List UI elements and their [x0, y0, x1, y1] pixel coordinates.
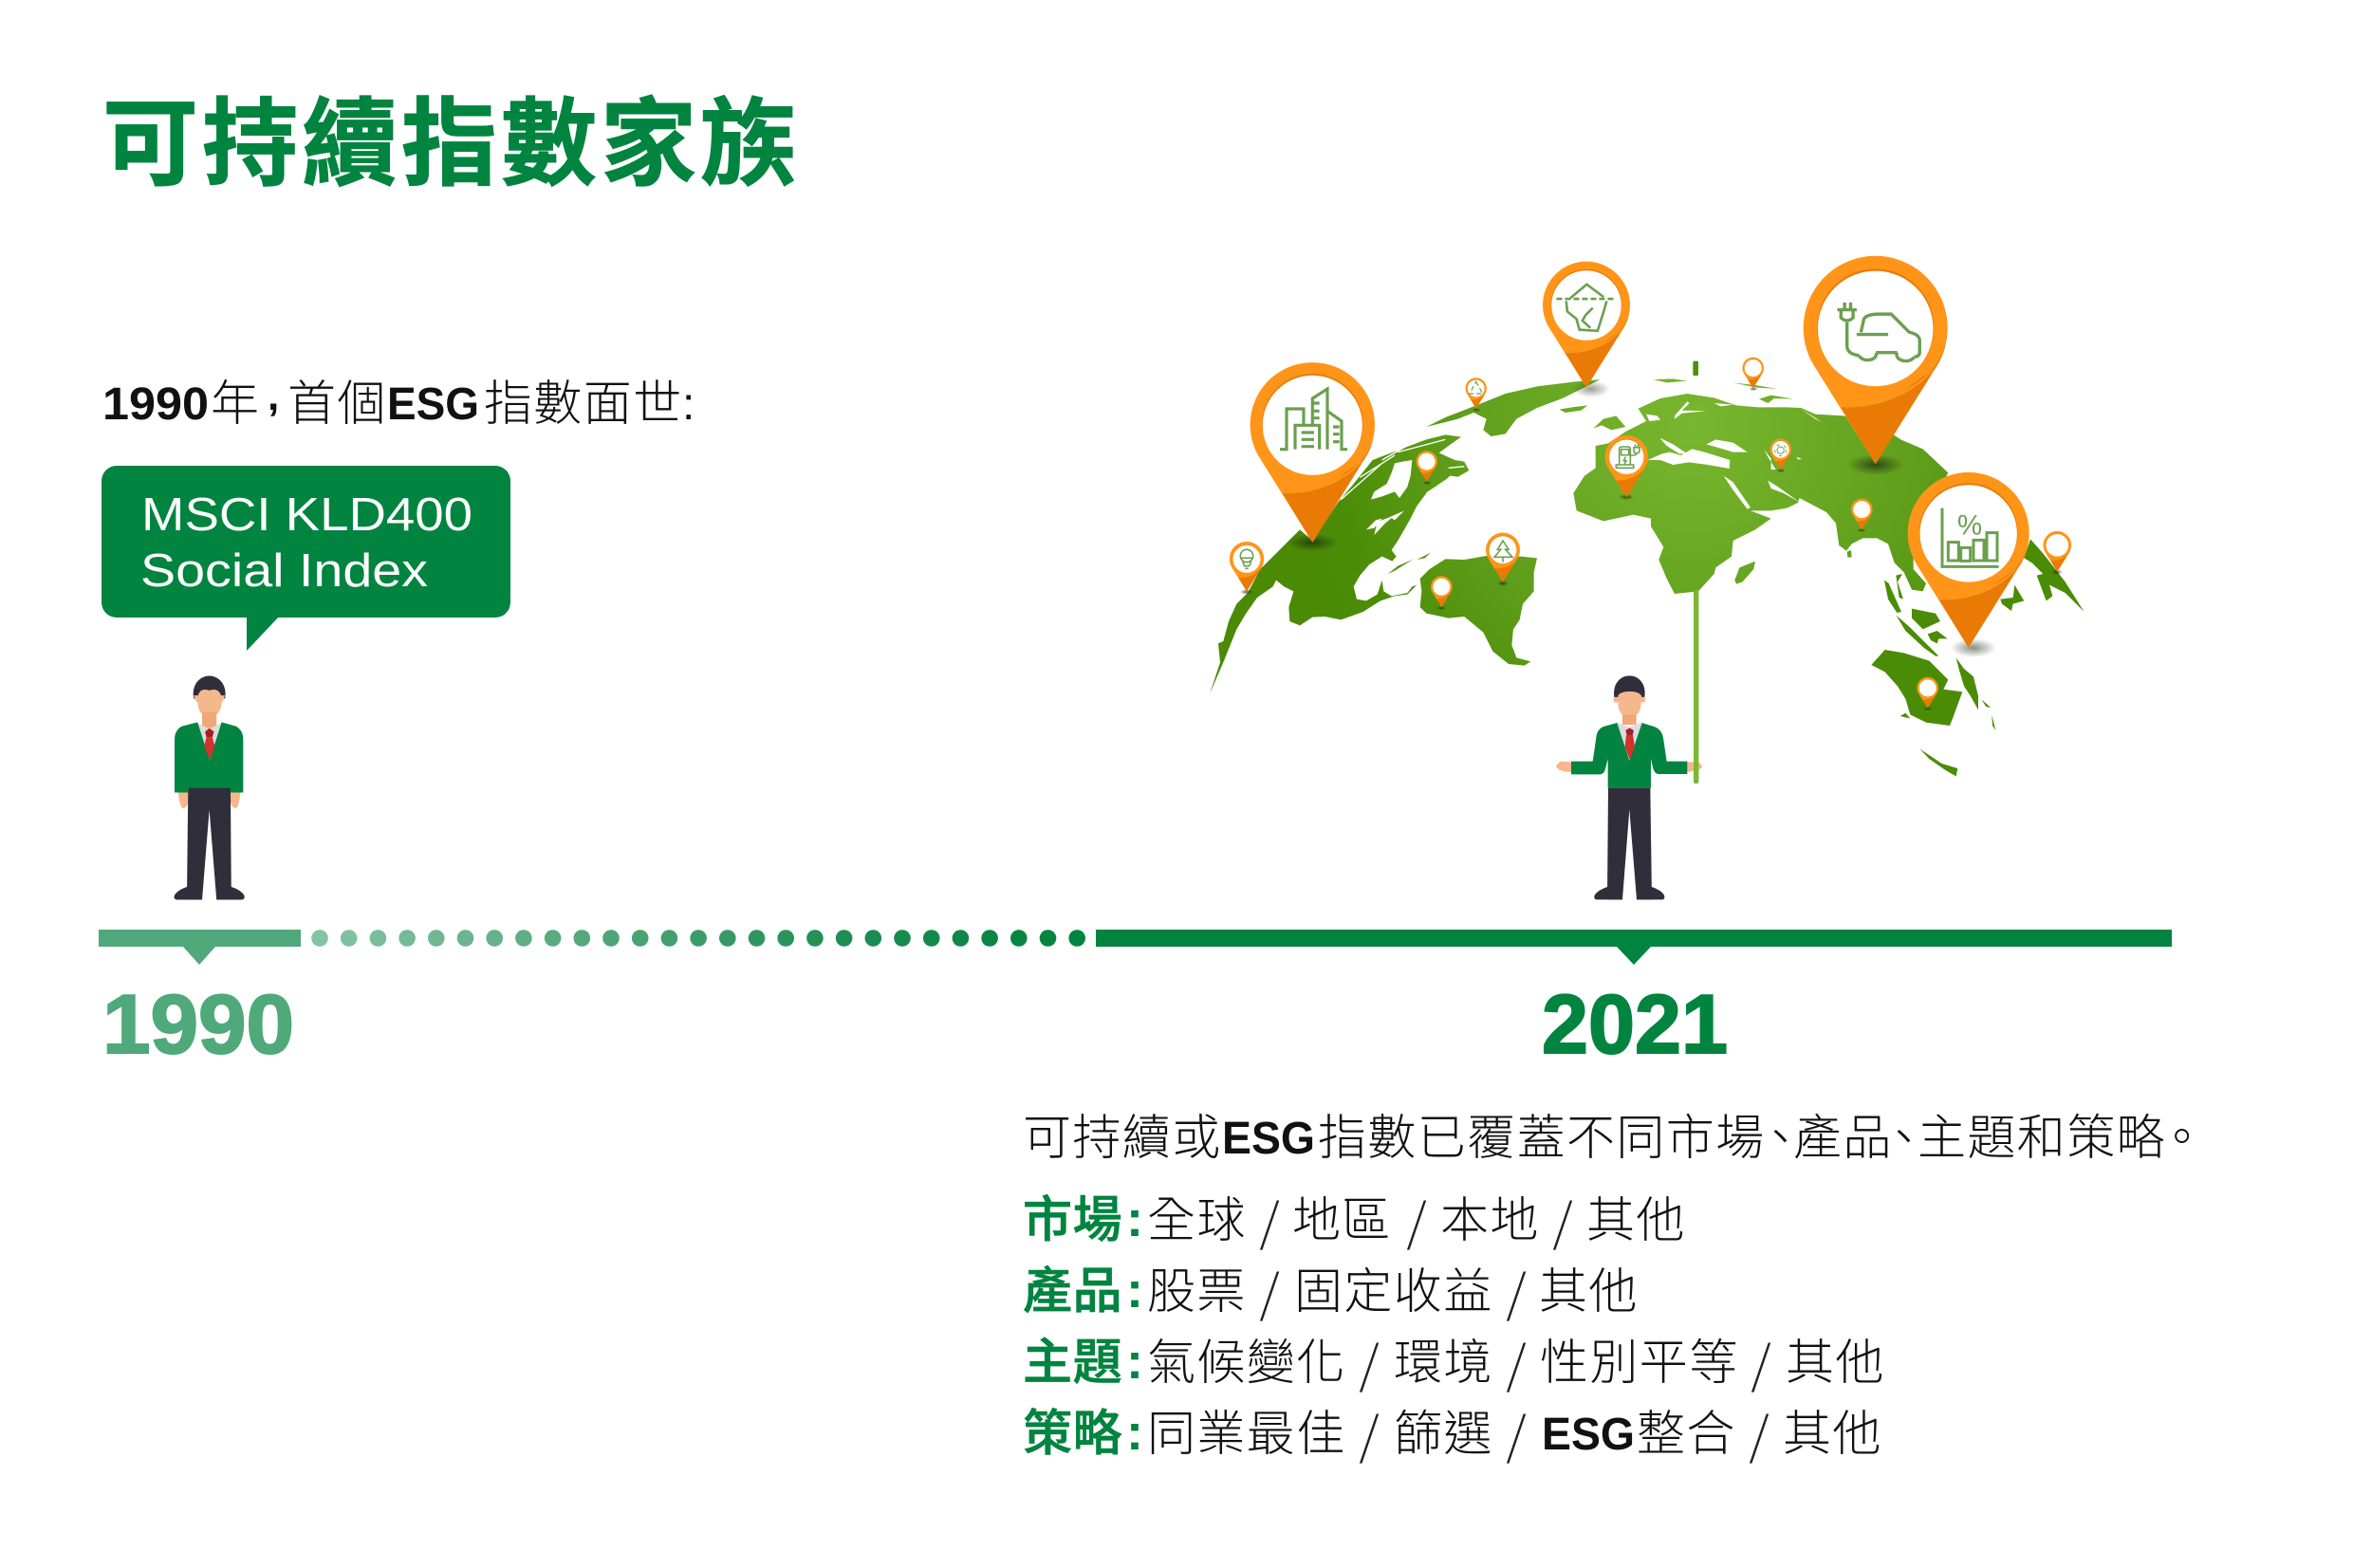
figure: man standing 1990 — [175, 676, 245, 899]
map: Americas and Greenland — [1210, 379, 1601, 694]
list row: strategy — [1023, 1394, 1882, 1469]
timeline: 2021 segment — [1096, 930, 2172, 965]
figure: presenter 2021 holding pointer — [1556, 675, 1702, 899]
list row: strategy: ESG — [1542, 1410, 1635, 1460]
list row: strategy: 其他 — [1783, 1407, 1882, 1461]
text block: 1990 intro: 指數面世 — [484, 377, 683, 431]
text block: summary sentence: 、 — [1756, 1111, 1806, 1165]
text block: 1990 intro: : — [682, 379, 695, 430]
big pin: percent bar chart — [1908, 472, 2029, 648]
list row: market: 全球 — [1147, 1193, 1247, 1247]
list row: market: 地區 — [1292, 1193, 1392, 1247]
small pin: blank South America — [1431, 576, 1453, 607]
list row: strategy: 整合 — [1637, 1407, 1736, 1461]
list row: product: 股票 — [1147, 1264, 1247, 1319]
list row: market: : — [1126, 1190, 1143, 1247]
list row: product: : — [1126, 1262, 1143, 1319]
text block: summary sentence: 可持續或 — [1023, 1111, 1222, 1165]
small pin: light bulb — [1230, 542, 1264, 592]
callout: MSCI KLD400 Social Index — [102, 466, 510, 651]
list row: market: 本地 — [1440, 1193, 1540, 1247]
list row: product — [1023, 1252, 1639, 1327]
text block: summary sentence — [1023, 1111, 2207, 1165]
list row: product: 固定收益 — [1294, 1264, 1493, 1319]
list row: market: 其他 — [1586, 1193, 1686, 1247]
list row: market: 市場 — [1023, 1193, 1122, 1248]
list row: theme: 性別平等 — [1540, 1336, 1739, 1390]
big pin: electric car — [1804, 256, 1948, 464]
text block: 1990 intro: 年 — [211, 377, 260, 431]
list row: strategy: / — [1359, 1394, 1380, 1469]
list row: strategy: 同業最佳 — [1147, 1407, 1346, 1461]
pin shadows — [1240, 380, 2063, 710]
timeline: dotted progress — [311, 930, 1085, 947]
list row: product: 其他 — [1539, 1264, 1639, 1319]
big pin: city buildings — [1251, 362, 1375, 543]
list row: market: / — [1406, 1181, 1427, 1256]
list row: theme: : — [1126, 1333, 1143, 1390]
list row: product: / — [1259, 1252, 1280, 1327]
year label 2021: 2021 — [1542, 977, 1728, 1071]
list row: theme: 主題 — [1023, 1336, 1122, 1391]
big pin: percent bar chart: % — [1957, 509, 1982, 541]
callout: MSCI KLD400 Social Index: MSCI KLD400 — [141, 489, 472, 541]
list row: theme — [1023, 1323, 1885, 1398]
text block: summary sentence: 、 — [1880, 1111, 1929, 1165]
list row: strategy: / — [1506, 1394, 1527, 1469]
list row: strategy: 篩選 — [1394, 1407, 1493, 1461]
big pin: iceberg — [1543, 262, 1630, 387]
list row: theme: 環境 — [1394, 1336, 1493, 1390]
small pin: blank Australia — [1917, 677, 1938, 709]
list row: product: / — [1506, 1252, 1527, 1327]
small pin: blank India — [1851, 499, 1873, 529]
text block: 1990 intro: 首個 — [287, 377, 387, 431]
text block: 1990 intro: 1990 — [102, 379, 209, 430]
list row: market: / — [1259, 1181, 1280, 1256]
text block: summary sentence: 產品 — [1793, 1111, 1893, 1165]
timeline: 1990 segment — [99, 930, 301, 965]
list row: theme: 氣候變化 — [1147, 1336, 1346, 1390]
small pin: tree — [1486, 533, 1520, 582]
list row: theme: 其他 — [1786, 1336, 1885, 1390]
text block: summary sentence: 指數已覆蓋不同市場 — [1318, 1111, 1766, 1165]
list row: product: 產品 — [1023, 1264, 1122, 1319]
small pin: blank Pacific — [2044, 531, 2071, 572]
small pin: recycle — [1465, 378, 1487, 409]
small pin: blank north — [1742, 358, 1764, 388]
list row: theme: / — [1359, 1323, 1380, 1398]
list row: strategy: : — [1126, 1404, 1143, 1461]
pointer stick — [1694, 590, 1698, 784]
text block: summary sentence: ESG — [1222, 1114, 1315, 1164]
list row: theme: / — [1506, 1323, 1527, 1398]
list row: market: / — [1552, 1181, 1573, 1256]
list row: strategy: / — [1749, 1394, 1769, 1469]
text block: 1990 intro — [102, 373, 695, 431]
title: 可持續指數家族 — [102, 92, 800, 198]
small pin: sun — [1770, 439, 1791, 470]
map: Eurasia and Africa — [1573, 361, 1948, 594]
text block: summary sentence: 主題和策略 — [1918, 1111, 2166, 1165]
list row: theme: / — [1751, 1323, 1771, 1398]
callout: MSCI KLD400 Social Index: Social Index — [140, 545, 428, 597]
list row: market — [1023, 1181, 1686, 1256]
map: Southeast Asia and Oceania — [1871, 539, 2084, 776]
list row: strategy: 策略 — [1023, 1407, 1122, 1462]
small pin: EV charger — [1605, 435, 1648, 497]
small pin: blank Canada — [1416, 451, 1437, 482]
year label 1990: 1990 — [102, 977, 294, 1071]
text block: 1990 intro: ESG — [387, 379, 479, 430]
text block: summary sentence: 。 — [2158, 1111, 2207, 1165]
text block: 1990 intro: , — [268, 373, 279, 419]
world map — [1210, 361, 2084, 776]
